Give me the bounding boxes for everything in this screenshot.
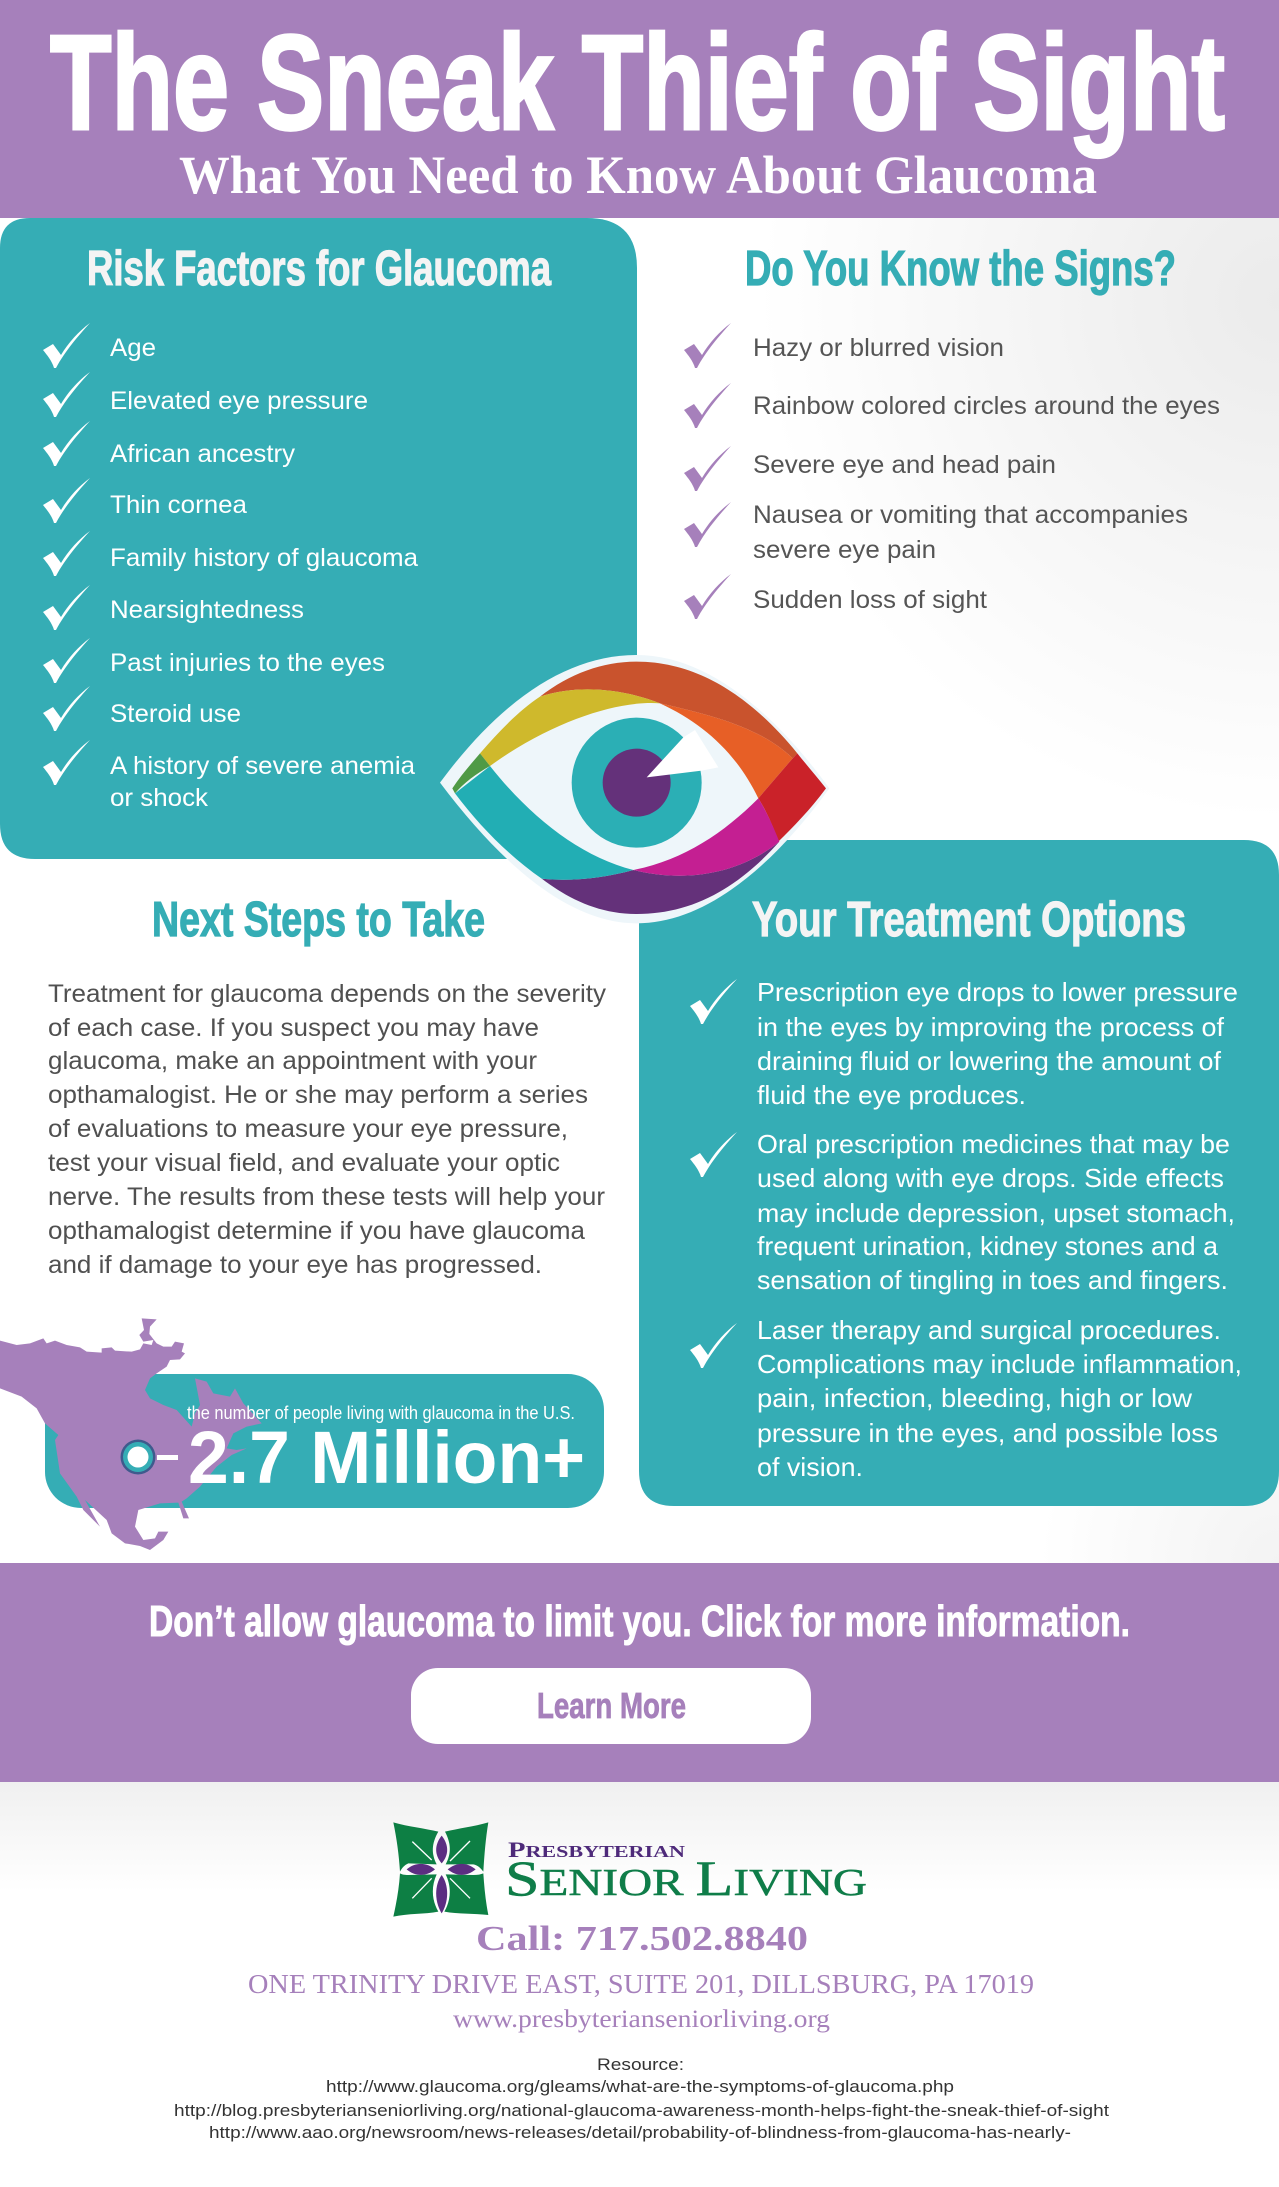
risk item: thin cornea: Thin cornea bbox=[110, 491, 247, 519]
map locator marker bbox=[120, 1440, 178, 1474]
risk item: nearsightedness: Nearsightedness bbox=[110, 596, 304, 624]
treatment item: eye drops bbox=[690, 977, 1238, 1110]
treatment item: oral medicines: used along with eye drops. Side effects bbox=[757, 1163, 1224, 1193]
risk item: past injuries: Past injuries to the eyes bbox=[110, 649, 385, 677]
treatment item: laser therapy: Complications may include inflammation, bbox=[757, 1349, 1242, 1379]
map: north america bbox=[0, 1318, 262, 1550]
contact: address: ONE TRINITY DRIVE EAST, SUITE 201, DILLSBURG, PA 17019 bbox=[248, 1969, 1034, 1999]
treatment item: oral medicines: sensation of tingling in toes and fingers. bbox=[757, 1265, 1228, 1295]
panel: signs bbox=[684, 242, 1220, 619]
text block: next steps paragraph: test your visual field, and evaluate your optic bbox=[48, 1149, 560, 1177]
treatment item: laser therapy bbox=[690, 1315, 1242, 1482]
sign item: severe pain bbox=[684, 446, 1056, 491]
subtitle: What You Need to Know About Glaucoma bbox=[179, 145, 1097, 205]
text block: next steps paragraph: nerve. The results from these tests will help your bbox=[48, 1183, 605, 1211]
logo wordmark: senior living: SENIOR LIVING bbox=[505, 1850, 867, 1906]
text block: next steps paragraph: opthamalogist determine if you have glaucoma bbox=[48, 1217, 585, 1245]
treatment item: eye drops: draining fluid or lowering the amount of bbox=[757, 1046, 1222, 1076]
icon: eye bbox=[440, 655, 829, 923]
resources bbox=[174, 2055, 1109, 2142]
logo: presbyterian senior living bbox=[393, 1822, 867, 1917]
sign item: nausea bbox=[684, 501, 1188, 564]
treatment item: eye drops: in the eyes by improving the process of bbox=[757, 1012, 1225, 1042]
risk item: past injuries bbox=[43, 638, 385, 683]
resources: http://www.glaucoma.org/gleams/what-are-the-symptoms-of-glaucoma.php bbox=[326, 2077, 954, 2096]
callout: 2.7 million statistic bbox=[0, 1318, 604, 1550]
resources: Resource: bbox=[597, 2055, 684, 2074]
sign item: hazy vision bbox=[684, 323, 1004, 368]
treatment item: laser therapy: Laser therapy and surgical procedures. bbox=[757, 1315, 1221, 1345]
risk item: african ancestry: African ancestry bbox=[110, 440, 296, 468]
text block: next steps paragraph bbox=[48, 980, 607, 1279]
treatment item: oral medicines: Oral prescription medicines that may be bbox=[757, 1129, 1230, 1159]
risk item: anemia or shock: A history of severe anemia bbox=[110, 752, 415, 780]
sign item: nausea: Nausea or vomiting that accompanies bbox=[753, 501, 1188, 529]
treatment item: oral medicines bbox=[690, 1129, 1235, 1295]
contact: website: www.presbyterianseniorliving.org bbox=[453, 2006, 831, 2033]
panel: risk factors bbox=[0, 218, 637, 859]
heading: risk factors: Risk Factors for Glaucoma bbox=[87, 242, 552, 296]
button: learn more bbox=[411, 1668, 811, 1744]
resources: http://www.aao.org/newsroom/news-releases/detail/probability-of-blindness-from-glaucoma-has-nearly- bbox=[209, 2123, 1071, 2142]
call to action banner bbox=[0, 1563, 1279, 1782]
risk item: elevated eye pressure bbox=[43, 372, 368, 417]
text block: next steps paragraph: Treatment for glaucoma depends on the severity bbox=[48, 980, 607, 1008]
text block: next steps paragraph: and if damage to your eye has progressed. bbox=[48, 1251, 542, 1279]
treatment item: laser therapy: pressure in the eyes, and possible loss bbox=[757, 1418, 1218, 1448]
risk item: anemia or shock: or shock bbox=[110, 784, 209, 812]
treatment item: eye drops: fluid the eye produces. bbox=[757, 1080, 1026, 1110]
treatment item: laser therapy: pain, infection, bleeding, high or low bbox=[757, 1383, 1192, 1413]
treatment item: laser therapy: of vision. bbox=[757, 1452, 863, 1482]
treatment item: oral medicines: frequent urination, kidney stones and a bbox=[757, 1231, 1219, 1261]
text block: next steps paragraph: opthamalogist. He or she may perform a series bbox=[48, 1081, 588, 1109]
contact: phone: Call: 717.502.8840 bbox=[476, 1919, 808, 1958]
icon: logo flower bbox=[393, 1822, 488, 1917]
risk item: family history: Family history of glaucoma bbox=[110, 544, 418, 572]
logo wordmark: presbyterian: PRESBYTERIAN bbox=[508, 1837, 686, 1862]
risk item: elevated eye pressure: Elevated eye pressure bbox=[110, 387, 368, 415]
text block: next steps paragraph: of evaluations to measure your eye pressure, bbox=[48, 1115, 568, 1143]
risk item: african ancestry bbox=[43, 421, 296, 468]
risk item: steroid use bbox=[43, 686, 241, 731]
sign item: rainbow circles: Rainbow colored circles around the eyes bbox=[753, 392, 1220, 420]
button: learn more: Learn More bbox=[537, 1685, 686, 1726]
risk item: nearsightedness bbox=[43, 585, 304, 630]
sign item: severe pain: Severe eye and head pain bbox=[753, 451, 1056, 479]
heading: next steps: Next Steps to Take bbox=[152, 893, 485, 947]
risk item: steroid use: Steroid use bbox=[110, 700, 241, 728]
risk item: age bbox=[43, 323, 156, 368]
text block: next steps paragraph: of each case. If you suspect you may have bbox=[48, 1014, 539, 1042]
resources: http://blog.presbyterianseniorliving.org/national-glaucoma-awareness-month-helps-fight-the-sneak-thief-of-sight bbox=[174, 2101, 1109, 2120]
sign item: nausea: severe eye pain bbox=[753, 536, 936, 564]
risk item: age: Age bbox=[110, 334, 156, 362]
risk item: thin cornea bbox=[43, 478, 247, 523]
sign item: rainbow circles bbox=[684, 383, 1220, 428]
text block: next steps paragraph: glaucoma, make an appointment with your bbox=[48, 1047, 537, 1075]
stat caption: the number of people living with glaucoma in the U.S. bbox=[187, 1403, 575, 1423]
sign item: hazy vision: Hazy or blurred vision bbox=[753, 334, 1004, 362]
header banner bbox=[0, 0, 1279, 218]
sign item: sudden loss bbox=[684, 574, 987, 619]
treatment item: oral medicines: may include depression, upset stomach, bbox=[757, 1198, 1235, 1228]
risk item: family history bbox=[43, 531, 418, 576]
panel: treatment options bbox=[639, 840, 1279, 1506]
treatment item: eye drops: Prescription eye drops to lower pressure bbox=[757, 977, 1238, 1007]
sign item: sudden loss: Sudden loss of sight bbox=[753, 586, 987, 614]
risk item: anemia or shock bbox=[43, 740, 415, 812]
stat number: 2.7 Million+ bbox=[188, 1416, 585, 1499]
